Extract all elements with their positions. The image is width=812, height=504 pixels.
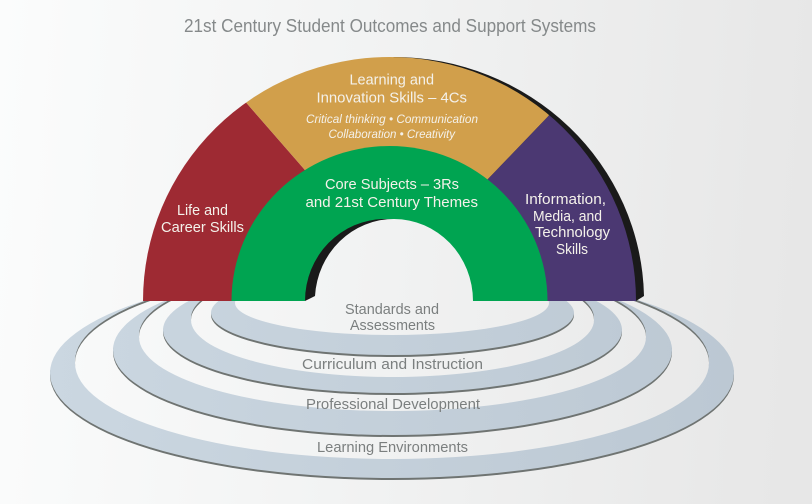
label: assessments: Assessments [350,317,435,334]
support systems rings [50,300,734,480]
label: professional development: Professional Development [306,396,481,413]
label: core subjects: Core Subjects – 3Rs [325,176,459,193]
label: core subjects: and 21st Century Themes [306,194,478,211]
label: life and career skills: Life and [177,202,228,219]
outer coloured segments [130,50,650,301]
ring: learning environments [50,300,734,480]
segment: information, media and technology skills [488,115,636,301]
segment: core subjects and themes [232,146,548,301]
label: information, media and technology skills [525,192,611,258]
label: learning and innovation skills: Innovation Skills – 4Cs [316,90,467,106]
ring: standards and assessments [211,301,574,357]
label: information, media and technology skills: Media, and [533,208,602,225]
label: life and career skills: Career Skills [161,219,244,236]
ring labels [302,301,483,456]
label: learning and innovation skills [306,72,478,141]
segment: life and career skills [143,102,305,301]
label: information, media and technology skills: Skills [556,241,588,258]
ring: professional development [113,301,672,437]
arch shadow [394,57,644,301]
inner arch opening [305,219,473,301]
label: learning and innovation skills: Collaboration • Creativity [328,127,456,141]
label: core subjects [306,176,478,211]
label: life and career skills [161,202,244,236]
ring: curriculum and instruction [163,301,622,395]
label: learning and innovation skills: Critical thinking • Communication [306,112,478,126]
label: learning and innovation skills: Learning and [350,72,434,88]
label: learning environments: Learning Environments [317,439,468,456]
title: 21st Century Student Outcomes and Support Systems [184,16,596,36]
label: standards and assessments: Standards and [345,301,439,318]
label: curriculum and instruction: Curriculum and Instruction [302,356,483,373]
label: information, media and technology skills: Technology [535,225,611,241]
label: information, media and technology skills: Information, [525,192,606,208]
arch: 21st century outcomes [130,50,650,301]
segment: learning and innovation skills [246,57,549,180]
